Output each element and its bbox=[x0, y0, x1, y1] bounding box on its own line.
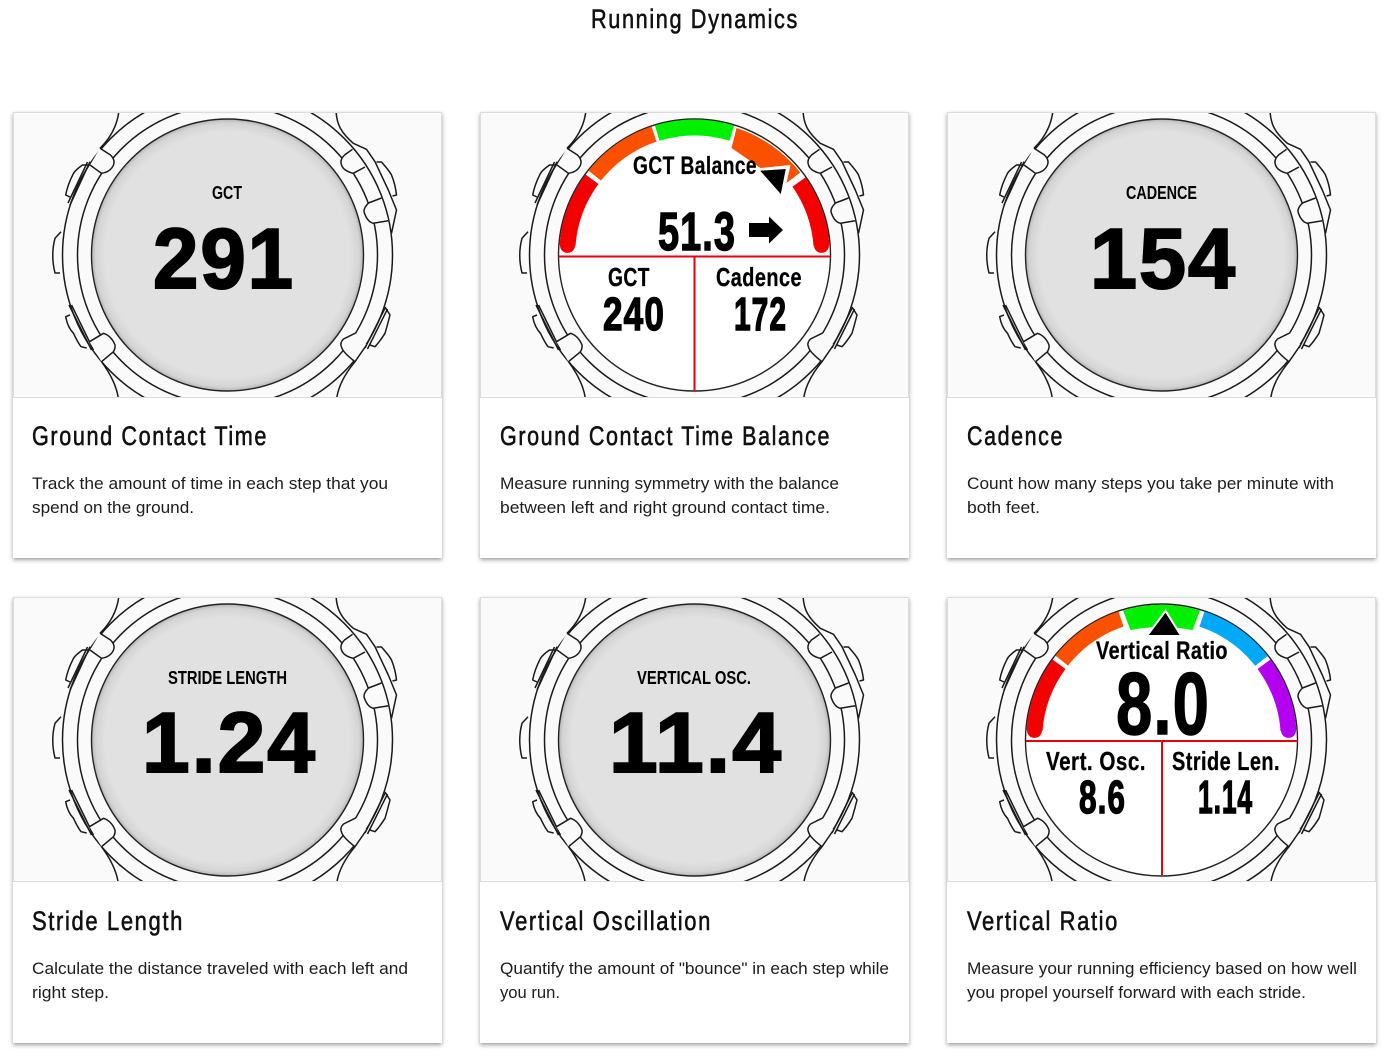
field: cadence: 172 bbox=[734, 288, 787, 340]
description: between left and right ground contact time. bbox=[500, 499, 830, 517]
description: Measure running symmetry with the balance bbox=[500, 475, 839, 493]
description: Count how many steps you take per minute with bbox=[967, 475, 1334, 493]
main value: 51.3 bbox=[658, 202, 736, 262]
field: vertical oscillation bbox=[1046, 746, 1146, 823]
description: you propel yourself forward with each stride. bbox=[967, 984, 1306, 1002]
marker bbox=[1149, 613, 1180, 635]
divider lines bbox=[1026, 741, 1298, 875]
watch illustration: stride length: STRIDE LENGTH bbox=[168, 668, 287, 688]
description: Quantify the amount of "bounce" in each step while bbox=[500, 960, 889, 978]
heading: Ground Contact Time bbox=[32, 421, 268, 451]
panel: ground contact time balance bbox=[480, 90, 909, 558]
watch illustration: cadence bbox=[948, 90, 1376, 420]
watch illustration: GCT: GCT bbox=[212, 183, 242, 203]
description: Calculate the distance traveled with each left and bbox=[32, 960, 408, 978]
watch illustration: cadence: CADENCE bbox=[1126, 183, 1197, 203]
title: Running Dynamics bbox=[591, 4, 799, 34]
watch illustration: stride length: 1.24 bbox=[142, 696, 317, 791]
heading: Cadence bbox=[967, 421, 1064, 451]
field: stride length: Stride Len. bbox=[1172, 746, 1280, 776]
field: cadence bbox=[716, 262, 802, 340]
description bbox=[967, 960, 1357, 1002]
description: right step. bbox=[32, 984, 109, 1002]
field: GCT bbox=[603, 262, 665, 340]
watch illustration: vertical oscillation bbox=[480, 575, 908, 905]
field: cadence: Cadence bbox=[716, 262, 802, 292]
field: GCT: GCT bbox=[608, 262, 650, 292]
description bbox=[500, 960, 889, 1002]
field: vertical oscillation: Vert. Osc. bbox=[1046, 746, 1146, 776]
gauge label: GCT Balance bbox=[633, 152, 757, 180]
watch illustration: GCT balance bbox=[480, 90, 908, 420]
description: Measure your running efficiency based on how well bbox=[967, 960, 1357, 978]
watch illustration: GCT bbox=[14, 90, 442, 420]
gauge label: Vertical Ratio bbox=[1096, 637, 1228, 665]
panel: ground contact time bbox=[13, 90, 442, 558]
field: stride length bbox=[1172, 746, 1280, 823]
description: spend on the ground. bbox=[32, 499, 194, 517]
description bbox=[967, 475, 1334, 517]
description bbox=[32, 960, 408, 1002]
heading: Stride Length bbox=[32, 906, 184, 936]
watch illustration: stride length bbox=[14, 575, 442, 905]
main value: 8.0 bbox=[1116, 654, 1210, 753]
heading: Ground Contact Time Balance bbox=[500, 421, 831, 451]
description bbox=[32, 475, 388, 517]
arrow bbox=[749, 216, 783, 244]
panel: vertical ratio bbox=[947, 575, 1376, 1043]
heading: Vertical Ratio bbox=[967, 906, 1119, 936]
watch illustration: vertical ratio bbox=[948, 575, 1376, 905]
watch illustration: GCT: 291 bbox=[153, 212, 295, 307]
field: stride length: 1.14 bbox=[1198, 771, 1253, 823]
field: GCT: 240 bbox=[603, 288, 665, 340]
gauge arc bbox=[1027, 605, 1296, 738]
description: both feet. bbox=[967, 499, 1040, 517]
field: vertical oscillation: 8.6 bbox=[1079, 771, 1126, 823]
watch illustration: cadence: 154 bbox=[1090, 212, 1237, 307]
description: you run. bbox=[500, 984, 560, 1002]
panel: stride length bbox=[13, 575, 442, 1043]
divider lines bbox=[558, 256, 830, 391]
marker bbox=[760, 169, 786, 194]
panel: vertical oscillation bbox=[480, 575, 909, 1043]
description bbox=[500, 475, 839, 517]
watch illustration: vertical oscillation: 11.4 bbox=[609, 696, 783, 791]
watch illustration: vertical oscillation: VERTICAL OSC. bbox=[637, 668, 751, 688]
heading: Vertical Oscillation bbox=[500, 906, 712, 936]
panel: cadence bbox=[947, 90, 1376, 558]
description: Track the amount of time in each step that you bbox=[32, 475, 388, 493]
gauge arc bbox=[560, 128, 829, 253]
